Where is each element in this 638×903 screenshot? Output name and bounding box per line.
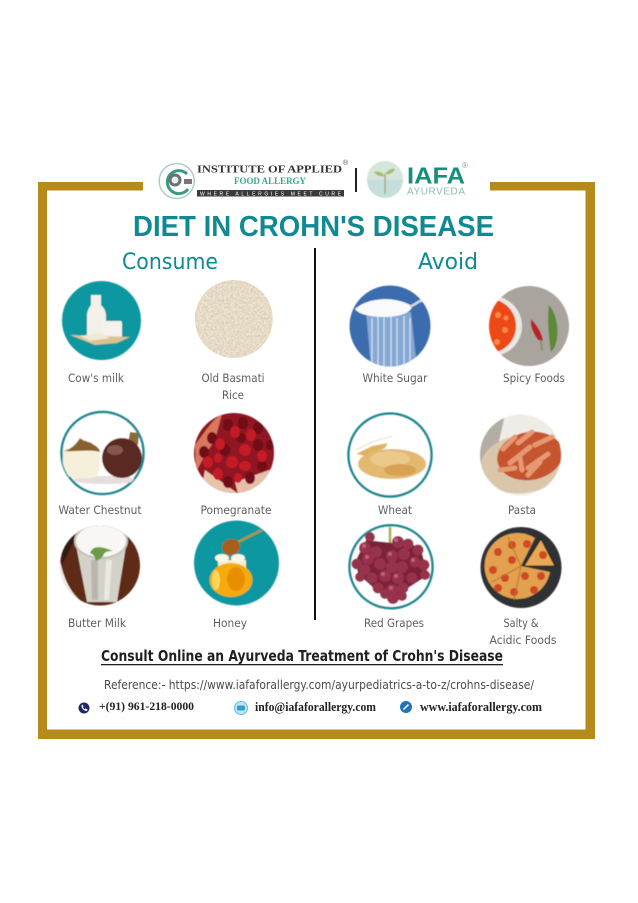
icon: milk bottle and glass	[62, 281, 141, 360]
registered mark: ®	[343, 159, 349, 167]
icon: pepperoni pizza	[480, 527, 562, 608]
icon: sugar pouring from spoon	[350, 286, 431, 368]
food: White Sugar	[350, 286, 431, 385]
panel: foods to avoid	[348, 286, 570, 647]
tagline bar: WHERE ALLERGIES MEET CURE	[200, 192, 342, 198]
icon: chilli sauce and peppers	[488, 286, 570, 366]
label: Red Grapes	[364, 616, 424, 630]
sprout emblem	[367, 161, 403, 198]
label: White Sugar	[362, 371, 428, 385]
food: Pomegranate	[194, 413, 275, 517]
institute name: INSTITUTE OF APPLIED	[197, 164, 342, 176]
food: Butter Milk	[60, 524, 140, 630]
label: Spicy Foods	[503, 371, 565, 385]
logo: Institute of Applied Food Allergy	[159, 159, 349, 198]
contact: phone	[78, 699, 194, 714]
gold frame	[38, 182, 595, 739]
food: Honey	[194, 520, 279, 630]
Ayurveda wordmark: AYURVEDA	[407, 186, 465, 198]
icon: wheat grains	[348, 414, 432, 496]
label: Butter Milk	[68, 616, 126, 630]
icon: water chestnut	[62, 412, 144, 494]
food: Red Grapes	[350, 525, 432, 630]
reference line: Reference:- https://www.iafaforallergy.com/ayurpediatrics-a-to-z/crohns-disease/	[104, 678, 535, 692]
icon: rice bowl	[195, 280, 273, 358]
registered mark: ®	[462, 161, 468, 170]
logo divider	[355, 168, 357, 192]
label: Pasta	[508, 503, 536, 517]
icon: bowl of pasta	[480, 414, 562, 496]
contact: website	[400, 700, 543, 714]
label: Salty &	[504, 616, 539, 630]
label: Cow's milk	[68, 371, 124, 385]
icon: pomegranate seeds	[194, 413, 275, 495]
icon: phone	[78, 702, 90, 714]
label: Pomegranate	[200, 503, 272, 517]
website address: www.iafaforallergy.com	[420, 700, 543, 714]
food: Old Basmati Rice: Rice	[222, 388, 244, 402]
column divider	[314, 248, 316, 620]
food: Pasta	[480, 414, 562, 514]
label: Old Basmati	[202, 371, 264, 385]
food: Salty and Acidic Foods	[480, 527, 562, 647]
food: Wheat	[348, 414, 432, 517]
email address: info@iafaforallergy.com	[255, 700, 377, 714]
logo emblem	[159, 164, 194, 198]
label: Water Chestnut	[58, 503, 142, 517]
IAFA wordmark: IAFA	[407, 162, 465, 188]
food: Spicy Foods	[488, 286, 570, 384]
phone number: +(91) 961-218-0000	[99, 699, 194, 713]
icon: glass of butter milk	[60, 524, 140, 606]
food allergy: FOOD ALLERGY	[234, 176, 306, 186]
label: Honey	[213, 616, 247, 630]
panel: consume foods	[58, 280, 279, 630]
icon: bunch of red grapes	[350, 525, 432, 608]
icon: honey jar and dipper	[194, 520, 279, 606]
icon: email	[234, 702, 248, 714]
call to action: Consult Online an Ayurveda Treatment of Crohn's Disease	[101, 647, 503, 665]
food: Old Basmati Rice	[195, 280, 273, 402]
food: Cow's milk	[62, 281, 141, 385]
food: Water Chestnut	[58, 412, 144, 517]
heading: Consume: Consume	[122, 250, 218, 275]
food: Salty and Acidic Foods: Acidic Foods	[490, 633, 556, 647]
heading: Avoid: Avoid	[418, 250, 478, 275]
logo: IAFA Ayurveda	[367, 161, 468, 198]
title: DIET IN CROHN'S DISEASE	[133, 211, 494, 243]
icon: link	[400, 701, 412, 713]
label: Wheat	[378, 503, 412, 517]
contact: email	[234, 700, 377, 714]
